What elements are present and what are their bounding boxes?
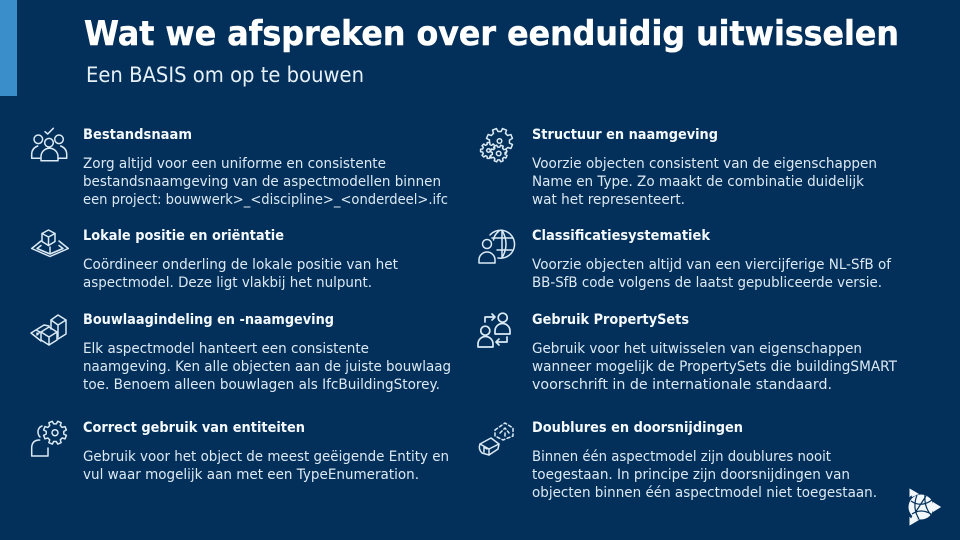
icon: logo globe with triangles [906,488,941,526]
subtitle: Een BASIS om op te bouwen [86,63,364,87]
text block: voorschrift in de internationale standaard. [532,376,832,393]
text block [532,340,897,393]
panel: Gebruik PropertySets [478,312,897,393]
text block: Gebruik voor het uitwisselen van eigenschappen [532,340,862,357]
text block: naamgeving. Ken alle objecten aan de juiste bouwlaag [83,358,451,375]
text block: Elk aspectmodel hanteert een consistente [83,340,369,357]
panel: Bouwlaagindeling en -naamgeving [31,312,451,393]
text block: Zorg altijd voor een uniforme en consistente [83,155,386,172]
panel: Bestandsnaam [32,127,448,208]
text block: vul waar mogelijk aan met een TypeEnumeration. [83,466,419,483]
text block: Voorzie objecten consistent van de eigenschappen [532,155,877,172]
text block: wanneer mogelijk de PropertySets die buildingSMART [532,358,897,375]
icon: group of people with check [32,128,67,161]
text block: Name en Type. Zo maakt de combinatie duidelijk [532,173,865,190]
heading: Bouwlaagindeling en -naamgeving [83,312,334,328]
text block: BB-SfB code volgens de laatst gepubliceerde versie. [532,274,882,291]
icon: stacked building blocks [31,315,66,345]
text block [83,256,398,291]
icon: two people exchanging [478,313,510,347]
text block: Voorzie objecten altijd van een viercijferige NL-SfB of [532,256,892,273]
text block [532,448,877,501]
heading: Correct gebruik van entiteiten [83,420,305,436]
text block: toe. Benoem alleen bouwlagen als IfcBuildingStorey. [83,376,440,393]
panel: Classificatiesystematiek [479,228,892,291]
accent bar [0,0,17,96]
text block [83,340,451,393]
icon: person with globe [479,230,515,263]
icon: house with dashed duplicate [479,423,513,455]
heading: Bestandsnaam [83,127,192,143]
heading: Classificatiesystematiek [532,228,711,244]
icon: person with gear [32,418,70,456]
text block: Binnen één aspectmodel zijn doublures nooit [532,448,831,465]
panel: Structuur en naamgeving [481,124,877,208]
text block: Coördineer onderling de lokale positie van het [83,256,398,273]
text block [83,448,449,483]
text block [83,155,448,208]
text block: een project: bouwwerk>_<discipline>_<onderdeel>.ifc [83,191,448,208]
heading: Gebruik PropertySets [532,312,689,328]
text block [532,256,892,291]
icon: cube on a plane [32,230,68,256]
text block: bestandsnaamgeving van de aspectmodellen binnen [83,173,441,190]
heading: Structuur en naamgeving [532,127,718,143]
text block: objecten binnen één aspectmodel niet toegestaan. [532,484,877,501]
panel: Doublures en doorsnijdingen [479,420,877,501]
text block [532,155,877,208]
text block: wat het representeert. [532,191,685,208]
heading: Doublures en doorsnijdingen [532,420,743,436]
text block: Gebruik voor het object de meest geëigende Entity en [83,448,449,465]
title: Wat we afspreken over eenduidig uitwisselen [84,14,899,54]
heading: Lokale positie en oriëntatie [83,228,284,244]
text block: toegestaan. In principe zijn doorsnijdingen van [532,466,850,483]
icon: gears [481,124,517,164]
text block: aspectmodel. Deze ligt vlakbij het nulpunt. [83,274,372,291]
panel: Lokale positie en oriëntatie [32,228,398,291]
panel: Correct gebruik van entiteiten [32,418,449,483]
